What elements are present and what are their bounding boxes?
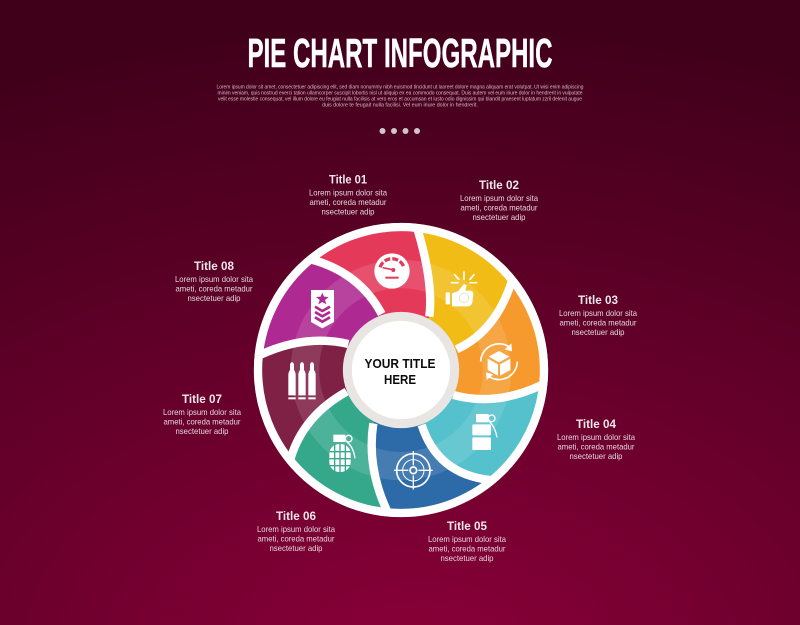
label: title 01 [309,174,387,216]
label: title 06: ameti, coreda metadur [258,534,335,544]
label: title 05: Title 05 [447,521,488,533]
label: title 06: nsectetuer adip [270,543,323,553]
label: title 08: nsectetuer adip [188,293,241,303]
label: title 03: Title 03 [578,295,618,307]
segment 06 green [291,370,401,510]
label: title 01: nsectetuer adip [322,206,375,216]
segment 01 red [311,226,430,370]
center title: YOUR TITLE [364,357,436,371]
title: PIE CHART INFOGRAPHIC [248,30,552,76]
label: title 07: Lorem ipsum dolor sita [163,407,241,417]
label: title 01: Title 01 [329,174,368,186]
center title [364,357,436,387]
segment 05 blue [372,370,490,511]
icon: hand grenade [329,435,355,472]
label: title 02: Lorem ipsum dolor sita [460,193,538,203]
segment 07 maroon [259,341,401,458]
label: title 03: Lorem ipsum dolor sita [559,308,637,318]
segment 03 orange [401,282,542,399]
label: title 07: ameti, coreda metadur [164,416,241,426]
label: title 07: nsectetuer adip [176,426,229,436]
label: title 08: Title 08 [194,261,235,273]
label: title 04: nsectetuer adip [570,451,623,461]
label: title 08: Lorem ipsum dolor sita [175,274,253,284]
label: title 04: ameti, coreda metadur [558,442,635,452]
label: title 06: Title 06 [276,511,316,523]
label: title 05: Lorem ipsum dolor sita [428,534,506,544]
icon: box with cycle arrows [481,343,517,380]
label: title 06 [257,511,335,553]
label: title 02: Title 02 [479,180,519,192]
icon: three bullets [288,362,316,399]
label: title 07: Title 07 [182,394,222,406]
intro paragraph: duis dolore te feugait nulla facilisi. Vel eum iriure dolor in hendrerit. [322,102,478,108]
label: title 04: Title 04 [576,419,617,431]
label: title 02: nsectetuer adip [472,212,526,222]
segment 04 teal [401,370,542,480]
label: title 03: nsectetuer adip [572,327,625,337]
label: title 01: Lorem ipsum dolor sita [309,188,387,198]
label: title 02: ameti, coreda metadur [460,202,538,212]
intro paragraph: Lorem ipsum dolor sit amet, consectetuer adipiscing elit, sed diam nonummy nibh euismod tincidunt ut laoreet dolore magna aliquam erat volutpat. Ut wisi enim adipiscing [216,84,584,90]
icon: crosshair target [394,451,433,490]
label: title 02 [460,180,538,222]
icon: military rank badge [311,290,334,328]
label: title 03: ameti, coreda metadur [560,318,637,328]
label: title 04 [557,419,635,461]
swirl pie chart [254,223,548,517]
label: title 01: ameti, coreda metadur [310,197,387,207]
center title: HERE [384,373,416,387]
label: title 05 [428,521,506,563]
label: title 05: ameti, coreda metadur [428,544,506,554]
label: title 06: Lorem ipsum dolor sita [257,524,335,534]
intro paragraph [216,84,584,108]
pagination dots [380,128,420,134]
intro paragraph: minim veniam, quis nostrud exerci tation ullamcorper suscipit lobortis nisl ut aliquip ex ea commodo consequat. Duis autem vel eum iriure dolor in hendrerit in vulputate [218,90,583,96]
label: title 05: nsectetuer adip [440,553,494,563]
segment 08 purple [260,259,401,370]
icon: speedometer [374,253,410,289]
center circle [347,316,455,424]
icon: cylinder grenade [472,414,497,450]
label: title 03 [559,295,637,337]
intro paragraph: velit esse molestie consequat, vel illum dolore eu feugiat nulla facilisis at vero eros et accumsan et iusto odio dignissim qui blandit praesent luptatum zzril delenit augue [218,96,582,102]
label: title 08: ameti, coreda metadur [176,284,253,294]
label: title 07 [163,394,241,436]
segment 02 yellow [401,227,512,370]
icon: thumbs up click [446,272,477,306]
label: title 04: Lorem ipsum dolor sita [557,432,635,442]
label: title 08 [175,261,253,303]
